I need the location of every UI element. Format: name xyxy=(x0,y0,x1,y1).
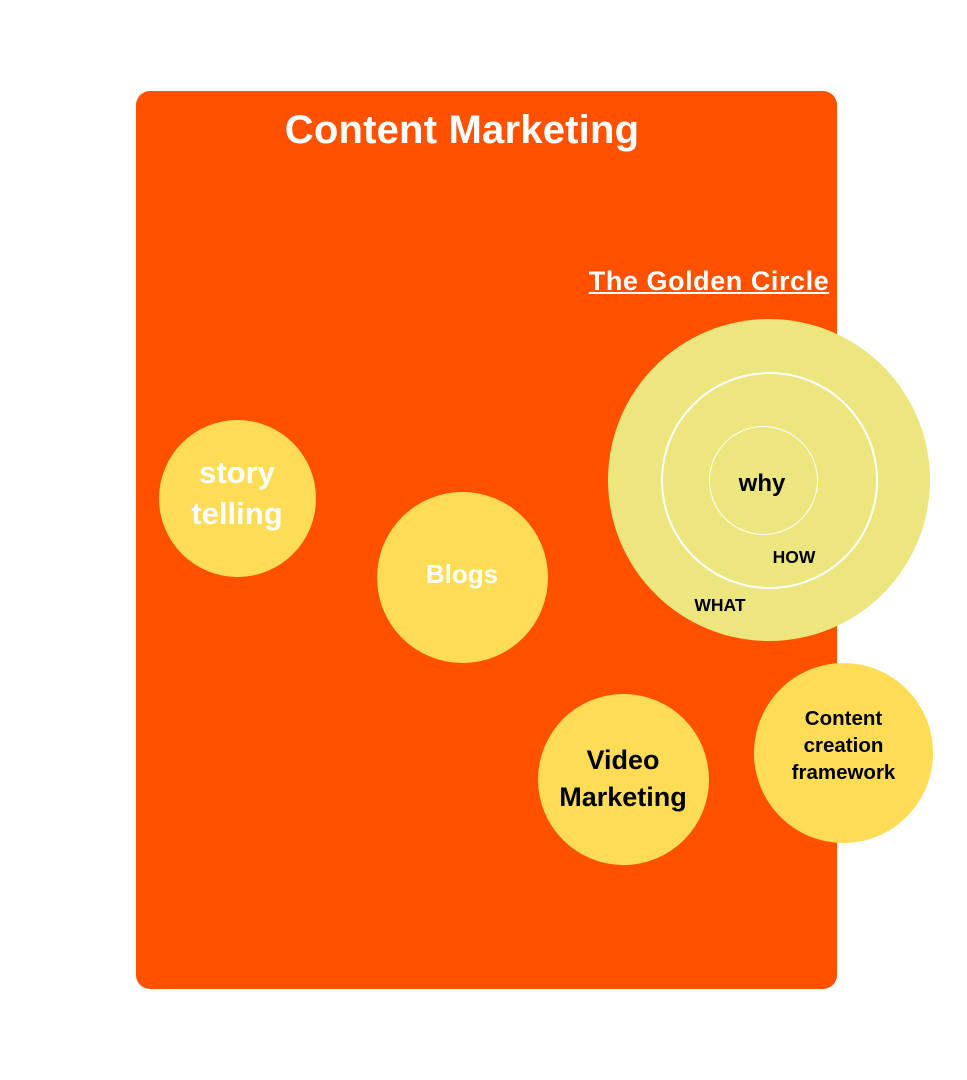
circle: content creation framework xyxy=(754,663,933,843)
label: why: why xyxy=(739,470,785,497)
circle: story telling xyxy=(159,420,316,577)
heading: the golden circle: The Golden Circle xyxy=(589,266,829,296)
panel: content marketing background xyxy=(136,91,837,989)
label: content creation framework: creation xyxy=(804,734,883,757)
label: what: WHAT xyxy=(694,595,746,615)
label: story telling xyxy=(191,455,283,531)
diagram: golden circle xyxy=(608,319,930,641)
ring: why xyxy=(709,426,818,535)
label: content creation framework: Content xyxy=(805,707,882,730)
title: Content Marketing xyxy=(285,108,639,152)
label: story telling: story xyxy=(199,455,275,490)
label: content creation framework xyxy=(792,707,896,784)
label: video marketing xyxy=(559,745,687,812)
label: story telling: telling xyxy=(191,496,283,531)
label: video marketing: Video xyxy=(586,745,660,775)
label: how: HOW xyxy=(773,547,815,567)
label: blogs: Blogs xyxy=(426,559,498,589)
ring: how xyxy=(661,372,878,589)
circle: blogs xyxy=(377,492,548,663)
label: video marketing: Marketing xyxy=(559,782,687,812)
label: content creation framework: framework xyxy=(792,761,895,784)
circle: video marketing xyxy=(538,694,709,865)
